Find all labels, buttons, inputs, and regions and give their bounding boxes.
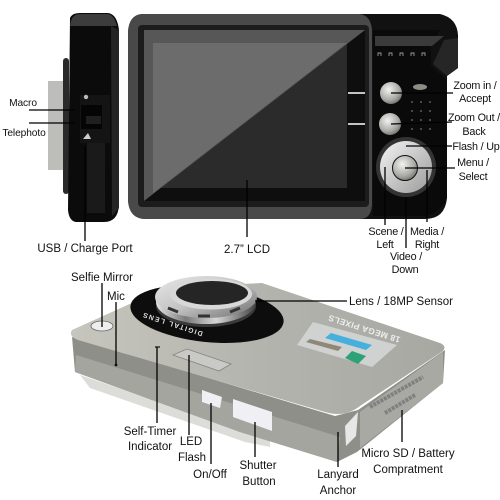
label: micro sd battery compartment: Compratment [373, 464, 444, 476]
lens protrusion [48, 81, 66, 170]
callout: media [426, 170, 428, 222]
callout: usb [84, 146, 86, 241]
lens opening [176, 281, 248, 305]
button panel [373, 30, 447, 216]
label: lanyard anchor: Lanyard [317, 469, 359, 481]
label: shutter button: Shutter [239, 460, 277, 472]
callout: zoom in [391, 92, 453, 94]
callout: on off [210, 403, 212, 464]
callout: macro [29, 109, 75, 111]
callout: flash up [406, 145, 452, 147]
top indicators [378, 53, 425, 56]
callout: lcd [246, 180, 248, 237]
label: macro: Macro [9, 98, 37, 109]
macro icon [84, 95, 88, 99]
label: menu select: Menu / [457, 157, 489, 169]
label: telephoto: Telephoto [2, 128, 46, 139]
callout: telephoto [29, 122, 75, 124]
label: self timer indicator: Self-Timer [124, 426, 176, 438]
menu select button [392, 156, 418, 180]
screen bezel [128, 14, 372, 219]
label: lens sensor: Lens / 18MP Sensor [349, 296, 453, 308]
label: flash up: Flash / Up [452, 141, 500, 153]
label: micro sd battery compartment: Micro SD / Battery [361, 448, 455, 460]
callout: video [405, 197, 407, 248]
label: zoom out back: Back [462, 126, 486, 138]
label: menu select: Select [459, 171, 488, 183]
callout: lens [255, 300, 347, 302]
white callout ticks on screen [348, 93, 365, 124]
label: zoom in accept: Accept [459, 93, 491, 105]
top plate [71, 283, 444, 414]
label: media right: Media / [410, 226, 444, 238]
bottom lip [80, 375, 270, 447]
self timer indicator [155, 346, 160, 348]
label: scene left: Scene / [368, 226, 404, 238]
zoom out button [379, 113, 401, 135]
label: scene left: Left [376, 239, 394, 251]
zoom in button [380, 82, 402, 104]
label: usb charge port: USB / Charge Port [37, 243, 133, 255]
megapixel print: 18 MEGA PIXELS [327, 313, 401, 345]
lens segments [168, 308, 240, 316]
label: shutter button: Button [242, 476, 276, 488]
label: media right: Right [415, 239, 439, 251]
label: video down: Video / [390, 251, 422, 263]
lens barrel [156, 285, 256, 327]
lens bezel [127, 278, 287, 350]
callout: scene [384, 167, 386, 225]
camera front view: DIGITAL LENS [141, 310, 204, 337]
label: self timer indicator: Indicator [128, 441, 172, 453]
label: video down: Down [392, 264, 419, 276]
camera back [128, 14, 458, 219]
camera side view [48, 13, 119, 222]
callout: lanyard [337, 432, 339, 467]
callout: mic [115, 302, 117, 366]
lanyard notch [345, 412, 358, 446]
selfie mirror [91, 321, 113, 331]
label: lanyard anchor: Anchor [320, 485, 356, 497]
callout: shutter [254, 422, 256, 457]
front face [72, 337, 445, 462]
macro switch panel [80, 95, 110, 143]
camera front view [71, 276, 445, 462]
label: selfie mirror: Selfie Mirror [71, 272, 133, 284]
back shell [128, 14, 458, 219]
callout: menu [405, 167, 455, 169]
directional pad [376, 137, 436, 197]
label: mic: Mic [107, 291, 125, 303]
indicator lamp [413, 84, 427, 90]
mountain icon [83, 133, 91, 139]
label: zoom in accept: Zoom in / [453, 80, 497, 92]
usb door [87, 143, 105, 213]
label: on off: On/Off [193, 469, 228, 481]
label: led flash: Flash [178, 452, 206, 464]
callout: self timer [156, 347, 158, 423]
callout: led flash [188, 355, 190, 435]
callout: micro sd [401, 410, 403, 442]
side body [68, 13, 119, 222]
callout: selfie mirror [101, 283, 103, 327]
callout: zoom out [391, 122, 452, 124]
speaker holes [411, 101, 431, 130]
on off switch [202, 390, 222, 408]
LCD screen [144, 30, 365, 201]
shutter button [233, 399, 272, 431]
sticker [297, 322, 397, 367]
led flash [173, 349, 231, 371]
label: led flash: LED [180, 436, 202, 448]
battery side panel [360, 352, 443, 448]
label: zoom out back: Zoom Out / [448, 112, 500, 124]
mic hole [115, 364, 117, 366]
label: lcd size: 2.7” LCD [224, 244, 270, 256]
